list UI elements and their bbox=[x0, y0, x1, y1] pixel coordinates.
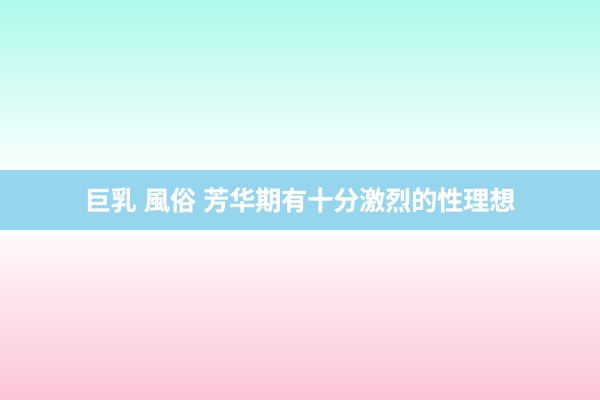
title band bbox=[0, 170, 600, 230]
title: 巨乳 風俗 芳华期有十分激烈的性理想 bbox=[85, 186, 515, 216]
